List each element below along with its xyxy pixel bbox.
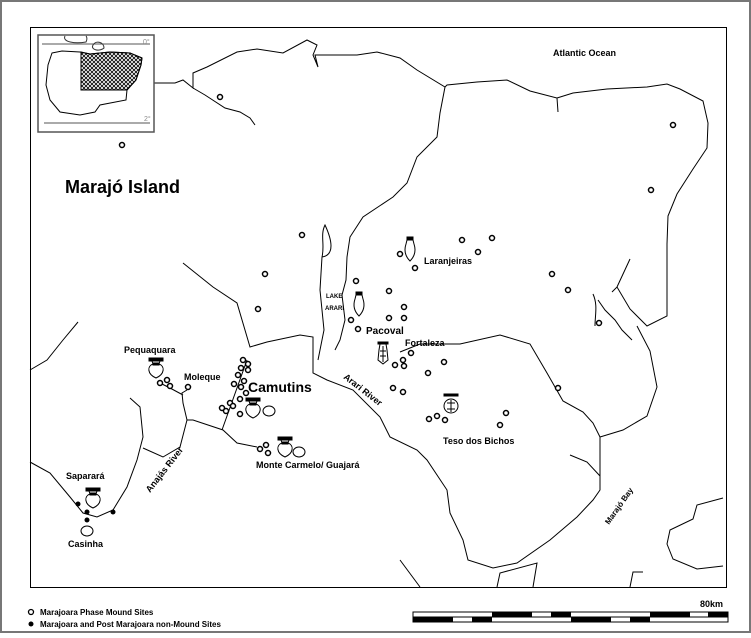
lake label: LAKE [326,294,342,300]
text: Pequaquara [124,345,177,355]
lake label [325,294,344,312]
text: Moleque [184,372,221,382]
scale bar [413,599,728,622]
map: coastlines and rivers [30,40,723,587]
mound sites (open circles) [120,94,676,456]
labels: Marajó Island [65,177,180,197]
text: Arari River [342,372,385,408]
text: Fortaleza [405,338,446,348]
legend: Marajoara Phase Mound Sites [40,608,154,617]
urn icons [81,237,458,536]
inset locator map: 0° [143,38,150,46]
text: Camutins [248,379,312,395]
text: Marajó Bay [603,486,635,526]
inset locator map [38,35,154,132]
text: Casinha [68,539,104,549]
non-mound sites (filled dots) [76,502,116,522]
inset locator map: 2° [144,115,151,123]
text: Anajás River [144,445,185,494]
scale bar: 80km [700,599,723,609]
text: Teso dos Bichos [443,436,514,446]
text: Laranjeiras [424,256,472,266]
lake label: ARARI [325,306,344,312]
text: Pacoval [366,326,404,337]
text: Monte Carmelo/ Guajará [256,460,361,470]
legend: Marajoara and Post Marajoara non-Mound Sites [40,620,221,629]
text: Saparará [66,471,106,481]
legend [28,608,221,629]
text: Atlantic Ocean [553,48,616,58]
